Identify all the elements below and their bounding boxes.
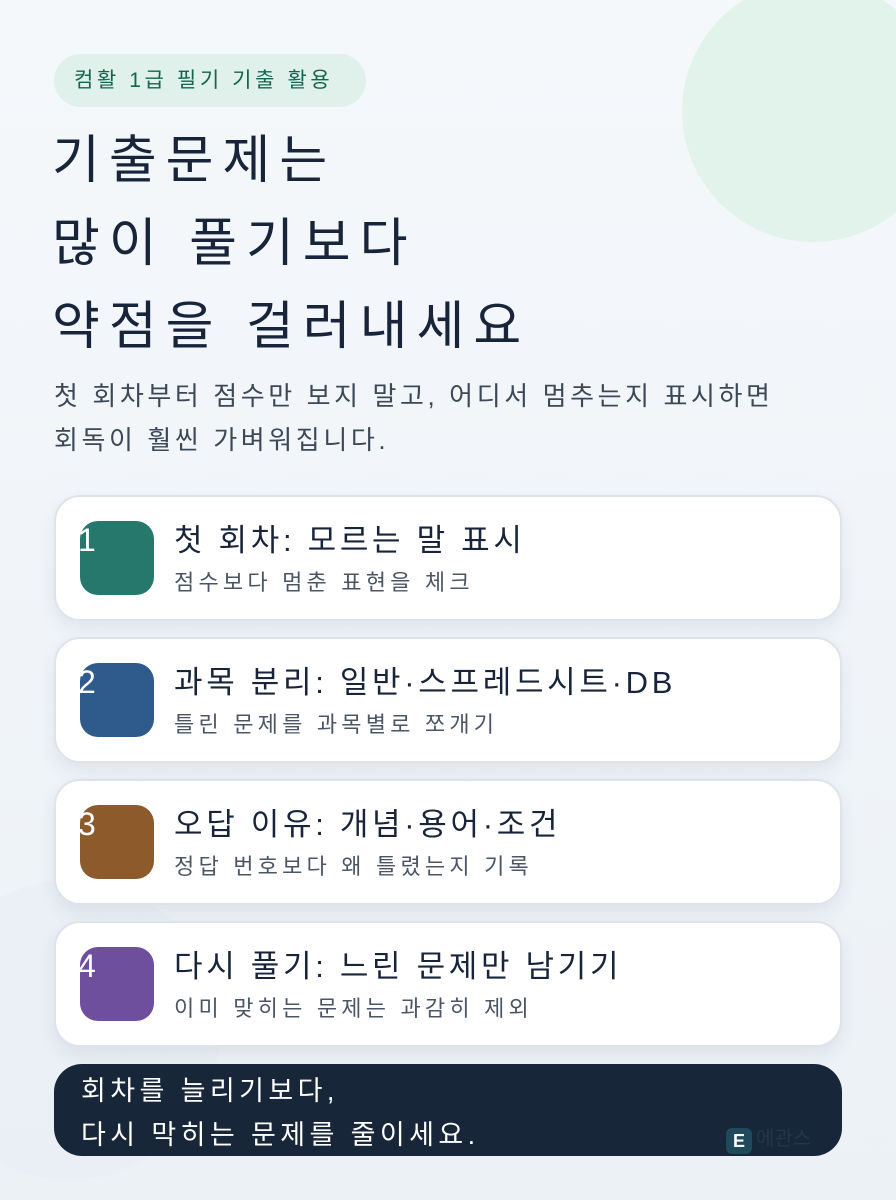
icon 3: 3 (78, 806, 96, 842)
card 2 (54, 637, 842, 763)
title: 많이 풀기보다 (52, 215, 416, 273)
icon 4 (80, 947, 154, 1021)
card 1 (54, 495, 842, 621)
card 1: 점수보다 멈춘 표현을 체크 (174, 570, 474, 595)
conclusion box (54, 1064, 842, 1156)
title: 기출문제는 (52, 132, 336, 190)
subtitle: 첫 회차부터 점수만 보지 말고, 어디서 멈추는지 표시하면 (54, 381, 774, 411)
subtitle (54, 381, 774, 455)
card 2: 과목 분리: 일반·스프레드시트·DB (174, 665, 676, 700)
card 3 (54, 779, 842, 905)
logo (726, 1128, 752, 1154)
decorative circle (682, 0, 896, 242)
icon 4: 4 (78, 948, 96, 984)
card 4 (54, 921, 842, 1047)
card 4: 다시 풀기: 느린 문제만 남기기 (174, 949, 622, 984)
tag: 컴활 1급 필기 기출 활용 (74, 69, 333, 92)
icon 1 (80, 521, 154, 595)
card 1: 첫 회차: 모르는 말 표시 (174, 523, 526, 558)
conclusion box: 회차를 늘리기보다, (81, 1076, 339, 1106)
icon 3 (80, 805, 154, 879)
icon 2: 2 (78, 664, 96, 700)
subtitle: 회독이 훨씬 가벼워집니다. (54, 425, 389, 455)
card 3: 오답 이유: 개념·용어·조건 (174, 807, 561, 842)
icon 2 (80, 663, 154, 737)
icon 1: 1 (78, 522, 96, 558)
tag (54, 54, 366, 107)
card 3: 정답 번호보다 왜 틀렸는지 기록 (174, 854, 533, 879)
card 2: 틀린 문제를 과목별로 쪼개기 (174, 712, 498, 737)
card 4: 이미 맞히는 문제는 과감히 제외 (174, 996, 533, 1021)
title (52, 132, 530, 356)
logo: E (733, 1131, 745, 1151)
conclusion box: 다시 막히는 문제를 줄이세요. (81, 1120, 480, 1150)
title: 약점을 걸러내세요 (52, 298, 530, 356)
conclusion box: 에관스 (756, 1128, 811, 1150)
